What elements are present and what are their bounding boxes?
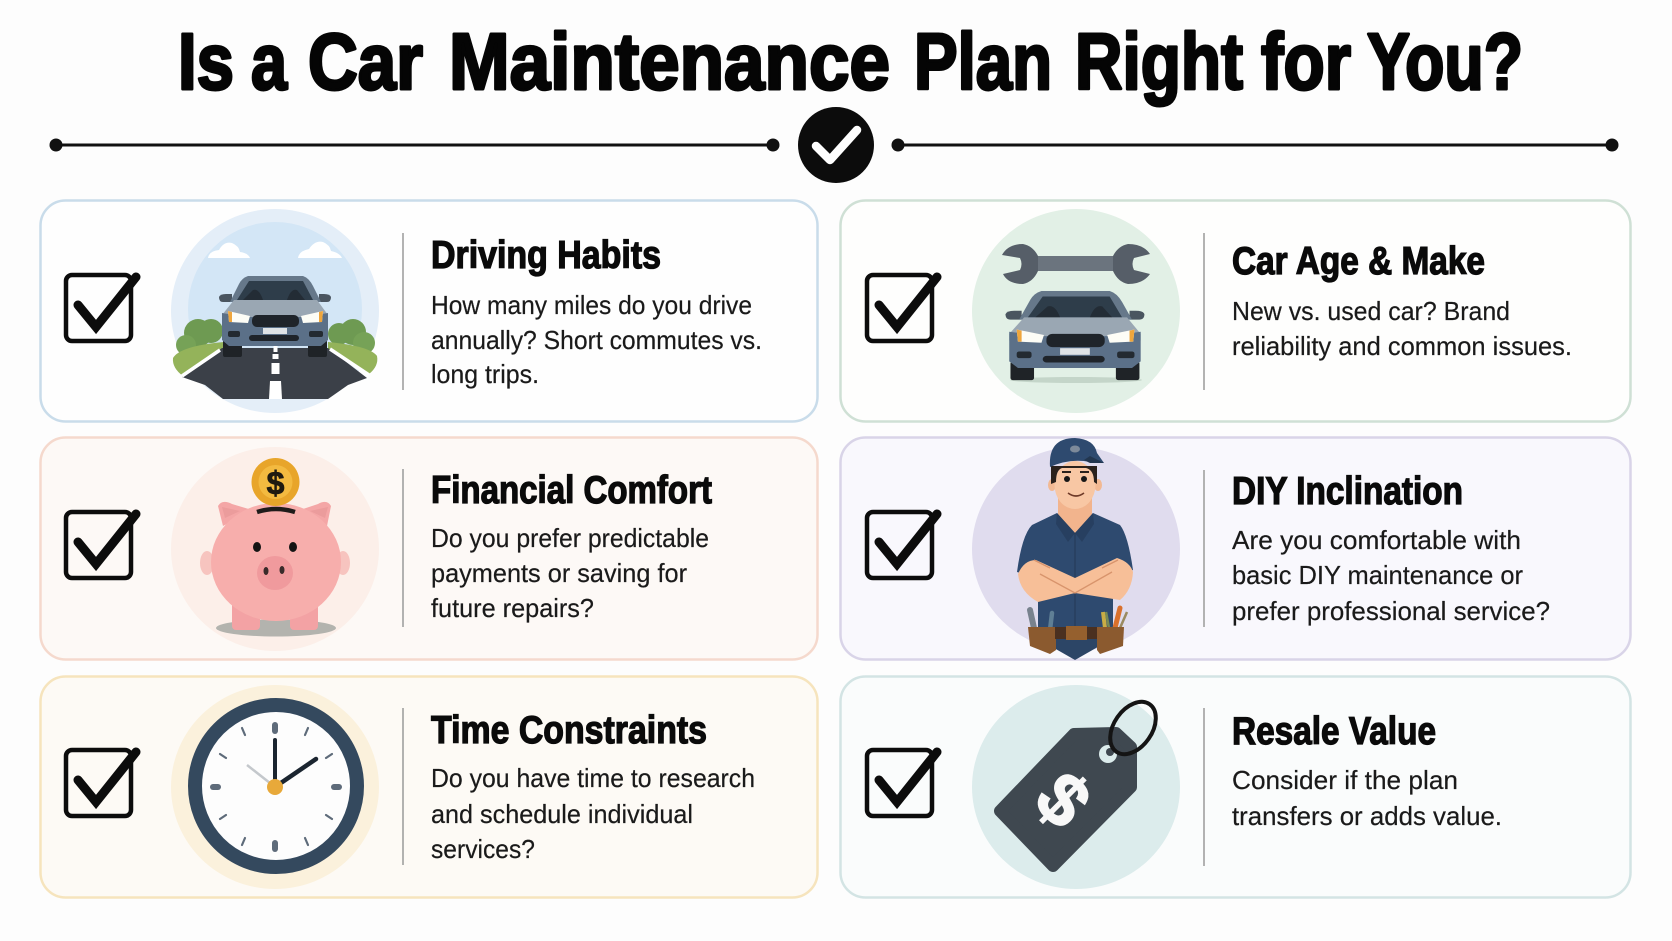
body text: New vs. used car? Brand <box>1232 296 1510 326</box>
panel: resale value <box>840 676 1630 898</box>
title: Plan <box>914 17 1052 106</box>
title: Is <box>178 17 234 106</box>
coin symbol: $ <box>267 465 285 501</box>
header divider with check badge <box>50 107 1618 183</box>
body text <box>431 763 755 864</box>
checkbox <box>66 275 136 341</box>
icon: price tag <box>972 685 1180 889</box>
icon: clock <box>171 685 379 889</box>
icon: car on road <box>171 209 379 413</box>
icon: wrench over car <box>972 209 1180 413</box>
body text: transfers or adds value. <box>1232 801 1502 831</box>
body text: Are you comfortable with <box>1232 525 1521 555</box>
checkbox <box>66 750 136 816</box>
heading: DIY Inclination <box>1232 470 1463 513</box>
body text: future repairs? <box>431 593 594 623</box>
body text: Do you prefer predictable <box>431 523 709 553</box>
heading: Resale Value <box>1232 710 1436 753</box>
tag dollar sign: $ <box>1019 756 1107 844</box>
body text: long trips. <box>431 359 539 389</box>
title: You? <box>1367 17 1523 106</box>
title: Maintenance <box>449 17 890 106</box>
body text: annually? Short commutes vs. <box>431 325 762 355</box>
body text: reliability and common issues. <box>1232 331 1572 361</box>
body text <box>1232 296 1572 361</box>
title: for <box>1261 17 1351 106</box>
body text <box>431 523 709 623</box>
checkbox <box>867 275 937 341</box>
title: Right <box>1075 17 1243 106</box>
body text: Do you have time to research <box>431 763 755 793</box>
body text <box>1232 525 1550 626</box>
body text: services? <box>431 834 535 864</box>
body text: payments or saving for <box>431 558 687 588</box>
body text: and schedule individual <box>431 799 693 829</box>
body text: prefer professional service? <box>1232 596 1550 626</box>
heading: Financial Comfort <box>431 469 712 512</box>
panel: DIY inclination <box>840 438 1630 660</box>
heading: Driving Habits <box>431 234 661 277</box>
body text: basic DIY maintenance or <box>1232 560 1523 590</box>
checkbox <box>867 750 937 816</box>
checkbox <box>867 512 937 578</box>
panel: time constraints <box>40 676 818 898</box>
body text <box>1232 765 1502 831</box>
panel: financial comfort <box>40 438 818 660</box>
panel: driving habits <box>40 200 818 422</box>
body text <box>431 290 762 389</box>
icon: piggy bank <box>171 447 379 651</box>
checkbox <box>66 512 136 578</box>
heading: Car Age & Make <box>1232 240 1485 283</box>
title: a <box>251 17 287 106</box>
icon: mechanic <box>972 438 1180 660</box>
icon: check badge <box>798 107 874 183</box>
title <box>178 17 1523 106</box>
panel: car age and make <box>840 200 1630 422</box>
body text: How many miles do you drive <box>431 290 752 320</box>
body text: Consider if the plan <box>1232 765 1458 795</box>
heading: Time Constraints <box>431 709 707 752</box>
title: Car <box>308 17 423 106</box>
